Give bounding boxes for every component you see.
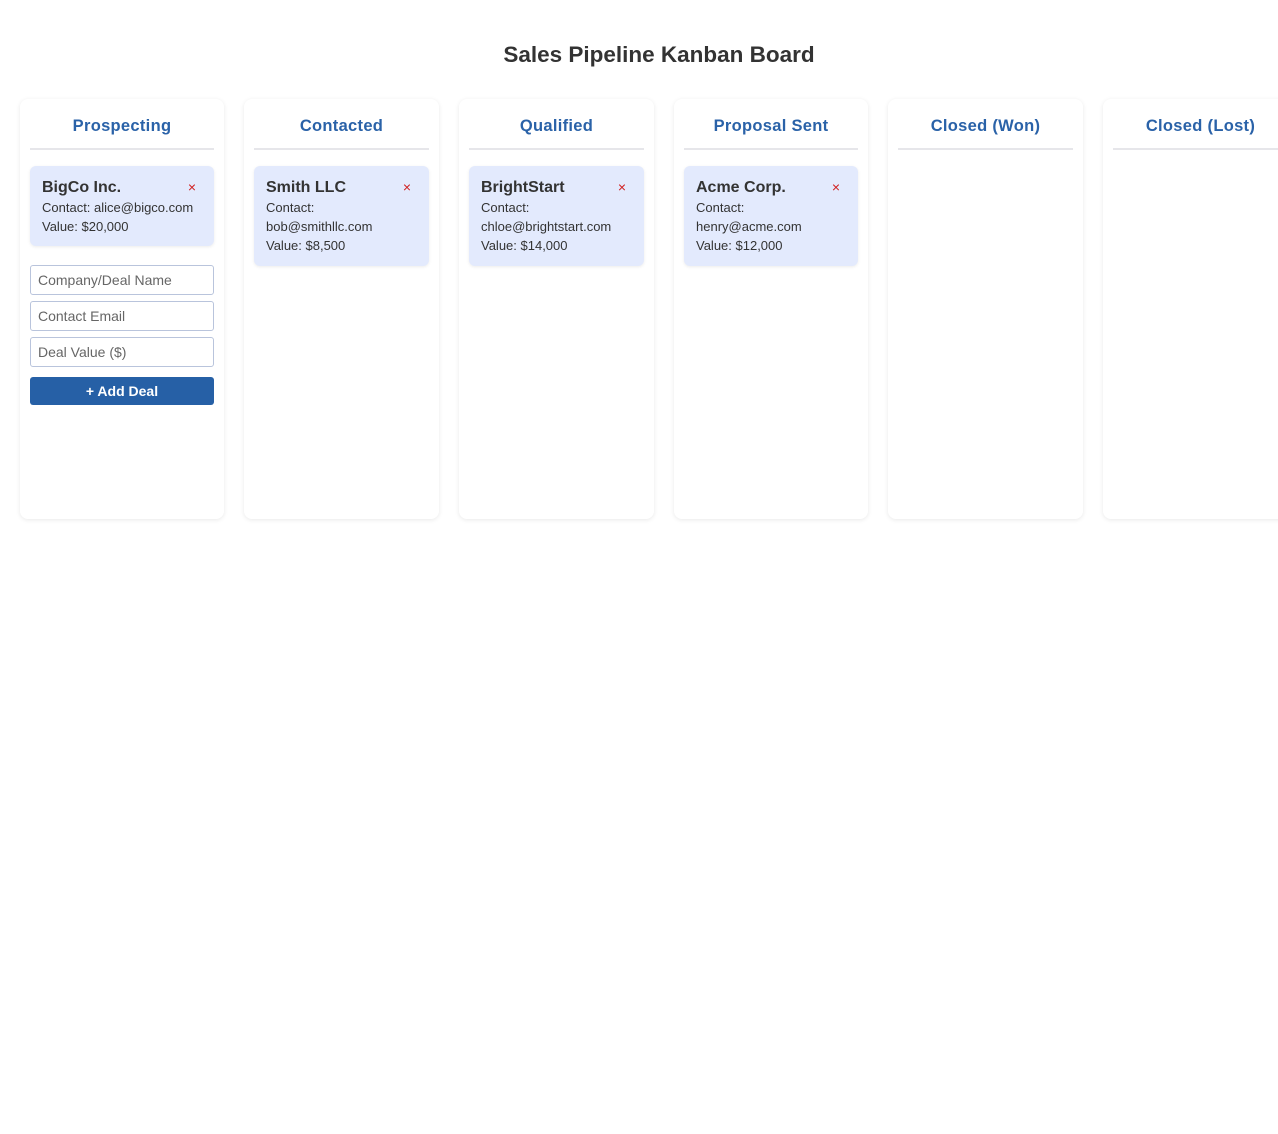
heading: Closed (Lost): [1113, 99, 1278, 150]
button: add deal: + Add Deal: [86, 383, 158, 399]
heading: Prospecting: Prospecting: [73, 117, 171, 135]
card: BigCo Inc.: Value: $20,000: [42, 219, 128, 234]
heading: Closed (Won): [898, 99, 1073, 150]
card: BigCo Inc.: BigCo Inc.: [42, 179, 121, 196]
heading: Closed (Lost): Closed (Lost): [1146, 117, 1255, 135]
card: BrightStart: BrightStart: [481, 179, 565, 196]
card: Acme Corp.: Acme Corp.: [696, 179, 786, 196]
input: email: [30, 301, 214, 331]
button: add deal: [30, 377, 214, 405]
card: BrightStart: [469, 166, 644, 266]
card: Smith LLC: [254, 166, 429, 266]
heading: Contacted: Contacted: [300, 117, 383, 135]
heading: Prospecting: [30, 99, 214, 150]
card: Smith LLC: Value: $8,500: [266, 238, 345, 253]
card: Smith LLC: Smith LLC: [266, 179, 346, 196]
card: Smith LLC: Contact:: [266, 200, 314, 215]
card: BrightStart: Value: $14,000: [481, 238, 568, 253]
card: Acme Corp.: Value: $12,000: [696, 238, 782, 253]
heading: Qualified: [469, 99, 644, 150]
card: BigCo Inc.: Contact: alice@bigco.com: [42, 200, 193, 215]
card: BrightStart: Contact:: [481, 200, 529, 215]
panel: Closed (Won): [888, 99, 1083, 519]
card: BrightStart: ×: [618, 179, 626, 195]
panel: Contacted: [244, 99, 439, 519]
card: Acme Corp.: ×: [832, 179, 840, 195]
card: BigCo Inc.: [30, 166, 214, 246]
heading: Proposal Sent: [684, 99, 858, 150]
heading: Qualified: Qualified: [520, 117, 593, 135]
title: Sales Pipeline Kanban Board: [503, 42, 815, 67]
card: Smith LLC: bob@smithllc.com: [266, 219, 372, 234]
input: email: Contact Email: [38, 308, 125, 324]
panel: Proposal Sent: [674, 99, 868, 519]
input: company: [30, 265, 214, 295]
panel: Closed (Lost): [1103, 99, 1278, 519]
heading: Proposal Sent: Proposal Sent: [714, 117, 828, 135]
input: value: [30, 337, 214, 367]
card: Acme Corp.: henry@acme.com: [696, 219, 802, 234]
card: Smith LLC: ×: [403, 179, 411, 195]
card: Acme Corp.: Contact:: [696, 200, 744, 215]
panel: Prospecting: [20, 99, 224, 519]
panel: Qualified: [459, 99, 654, 519]
card: BigCo Inc.: ×: [188, 179, 196, 195]
card: BrightStart: chloe@brightstart.com: [481, 219, 611, 234]
card: Acme Corp.: [684, 166, 858, 266]
heading: Contacted: [254, 99, 429, 150]
input: value: Deal Value ($): [38, 344, 126, 360]
input: company: Company/Deal Name: [38, 272, 172, 288]
heading: Closed (Won): Closed (Won): [931, 117, 1040, 135]
